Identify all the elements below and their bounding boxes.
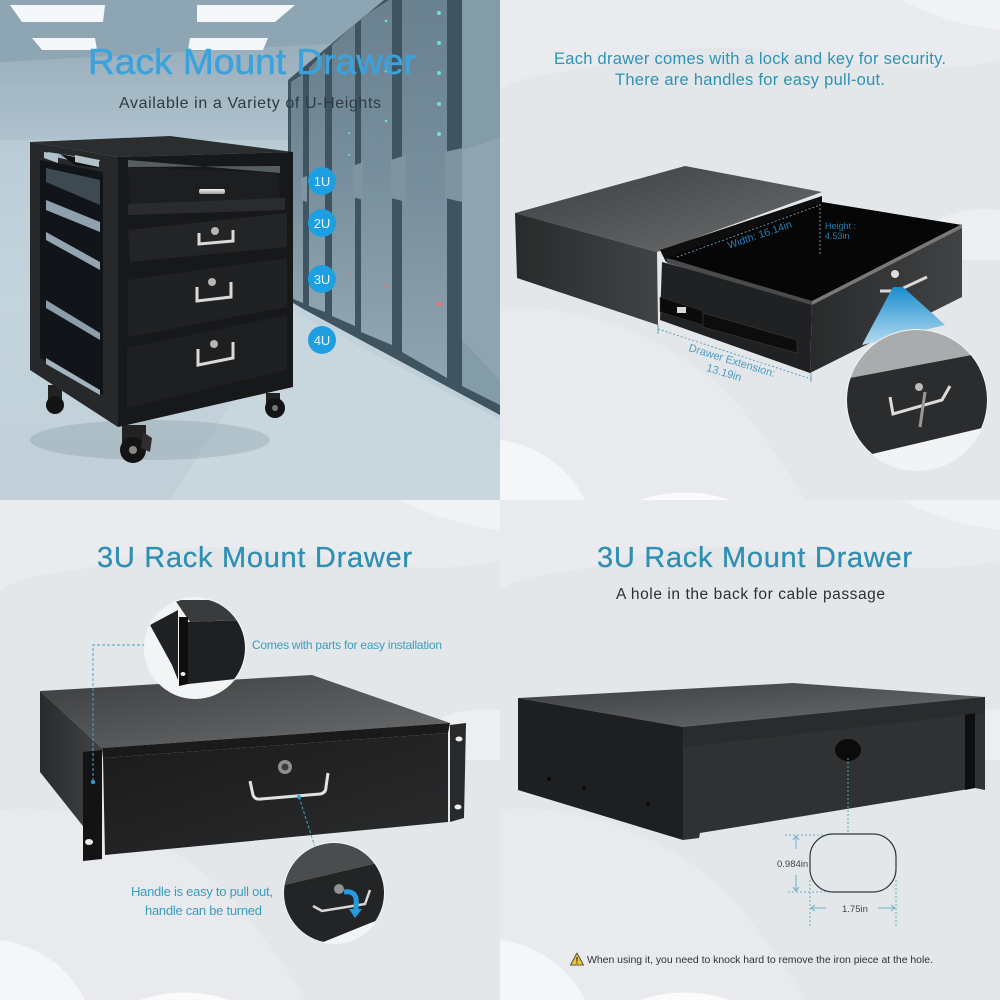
cable hole [835,739,861,761]
casters [46,385,285,463]
drawer 1U [128,189,285,215]
drawer 4U [196,340,234,367]
dimension: drawer extension [658,325,811,384]
open drawer [515,166,962,373]
title: Rack Mount Drawer [88,41,416,82]
panel: lock and key [500,0,1000,500]
hole dimensions diagram: 1.75in [842,904,868,915]
cabinet top [30,136,293,157]
U-height labels: 1U [314,174,330,189]
dimension: height [820,204,856,255]
label: handle: Handle is easy to pull out, [131,884,273,899]
callout line: hole [847,758,849,834]
description text [554,50,946,89]
mounting ear right [450,723,466,822]
panel: 3U back view [500,500,1000,1000]
callout line: handle [297,795,315,847]
dimension: height: Height : [825,221,856,231]
cabinet side [30,142,118,427]
icon: warning triangle [570,953,584,965]
handle and lock [880,270,927,291]
label: handle: handle can be turned [145,903,262,918]
drawer 3U [128,258,287,337]
U-height labels: 4U [314,333,330,348]
handle and lock [250,760,328,799]
drawer 2U [128,213,287,262]
callout line: parts [91,645,145,784]
rack cabinet [30,136,293,463]
title: 3U Rack Mount Drawer [97,542,412,574]
cabinet front frame [118,152,293,427]
zoom circle: lock with key [846,329,988,471]
server cabinets [288,0,500,415]
hole dimensions diagram: 0.984in [777,859,808,870]
hole dimensions diagram [777,834,896,927]
label: handle [131,884,273,918]
subtitle: Available in a Variety of U-Heights [119,95,381,112]
title: 3U Rack Mount Drawer [597,542,912,574]
dimension: drawer extension: Drawer Extension: [687,342,777,380]
ceiling lights [10,5,295,50]
panel: 3U front view [0,500,500,1000]
mounting ear left [83,750,102,861]
zoom circle: handle [280,840,390,945]
U-height labels [308,167,336,354]
warning note: When using it, you need to knock hard to remove the iron piece at the hole. [587,954,933,966]
description text: There are handles for easy pull-out. [615,71,885,89]
U-height labels: 2U [314,216,330,231]
zoom circle: mounting parts [144,597,250,699]
U-height labels: 3U [314,272,330,287]
panel: rack with drawers [0,0,500,500]
dimension: drawer extension: 13.19in [705,362,743,384]
label: parts: Comes with parts for easy installation [252,638,442,652]
drawer back view [518,683,985,840]
subtitle: A hole in the back for cable passage [616,586,885,603]
magnifier beam [862,287,945,345]
drawer slide rail [660,297,797,353]
description text: Each drawer comes with a lock and key for security. [554,50,946,68]
dimension: height: 4.53in [825,231,850,241]
drawer front view [40,675,466,861]
dimension: width: Width: 16.14in [726,219,794,252]
dimension: width [677,205,820,257]
